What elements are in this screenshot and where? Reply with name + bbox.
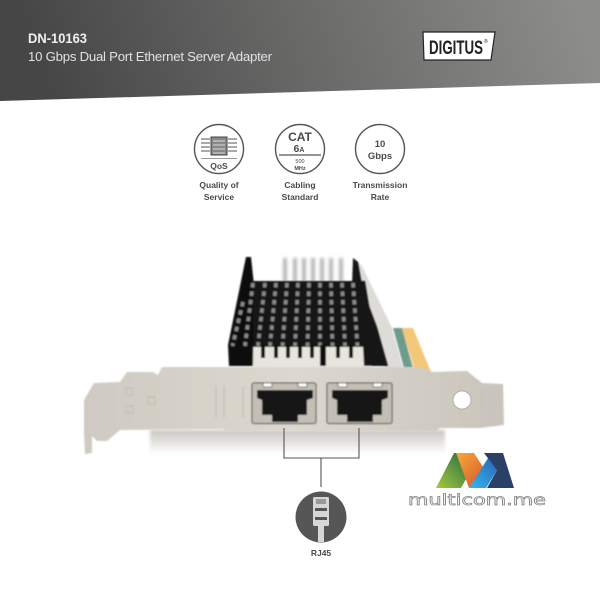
icon: CAT 6A: 500 <box>295 159 305 165</box>
subtitle: 10 Gbps Dual Port Ethernet Server Adapter <box>28 49 273 64</box>
feature icons row <box>194 124 407 202</box>
header band <box>0 0 600 101</box>
circuit board edge <box>354 258 403 368</box>
logo: DIGITUS <box>423 32 495 60</box>
label: RJ45: RJ45 <box>311 548 331 558</box>
icon: QoS <box>194 124 244 174</box>
bracket embossed marks <box>126 386 481 418</box>
icon: CAT 6A: MHz <box>294 166 306 172</box>
label: Quality of Service: Service <box>204 192 234 202</box>
port 2 <box>327 383 392 424</box>
label: Transmission Rate: Transmission <box>353 180 407 190</box>
screw hole <box>453 391 471 409</box>
logo mark <box>436 453 514 488</box>
logo: DIGITUS: ® <box>484 38 488 45</box>
heatsink fins top <box>285 258 341 282</box>
label: Transmission Rate: Rate <box>371 192 389 202</box>
logo: DIGITUS: DIGITUS <box>429 38 483 59</box>
connector lines from ports to RJ45 <box>284 428 359 487</box>
label: Quality of Service: Quality of <box>199 180 239 190</box>
icon: CAT 6A <box>276 124 324 174</box>
title: DN-10163 <box>28 31 87 46</box>
icon: 10 Gbps: Gbps <box>368 151 392 162</box>
icon: CAT 6A: CAT <box>288 130 313 144</box>
bracket top rim <box>162 372 432 374</box>
logo text: multicom.me <box>408 491 546 509</box>
card shadow <box>150 430 445 454</box>
icon: QoS: QoS <box>210 161 228 171</box>
port 1 <box>252 383 316 424</box>
heatsink <box>228 257 388 368</box>
icon: 10 Gbps: 10 <box>375 139 385 150</box>
product photo: network card <box>84 257 504 454</box>
icon: 10 Gbps <box>356 124 404 174</box>
label: Cabling Standard: Cabling <box>284 180 316 190</box>
heatsink teeth <box>261 345 353 366</box>
icon: CAT 6A: 6A <box>294 143 304 155</box>
label: Cabling Standard: Standard <box>282 192 318 202</box>
icon: RJ45 plug <box>296 492 346 542</box>
gold fingers <box>393 328 431 374</box>
watermark logo: multicom.me <box>408 453 546 509</box>
bracket plate <box>84 367 504 454</box>
